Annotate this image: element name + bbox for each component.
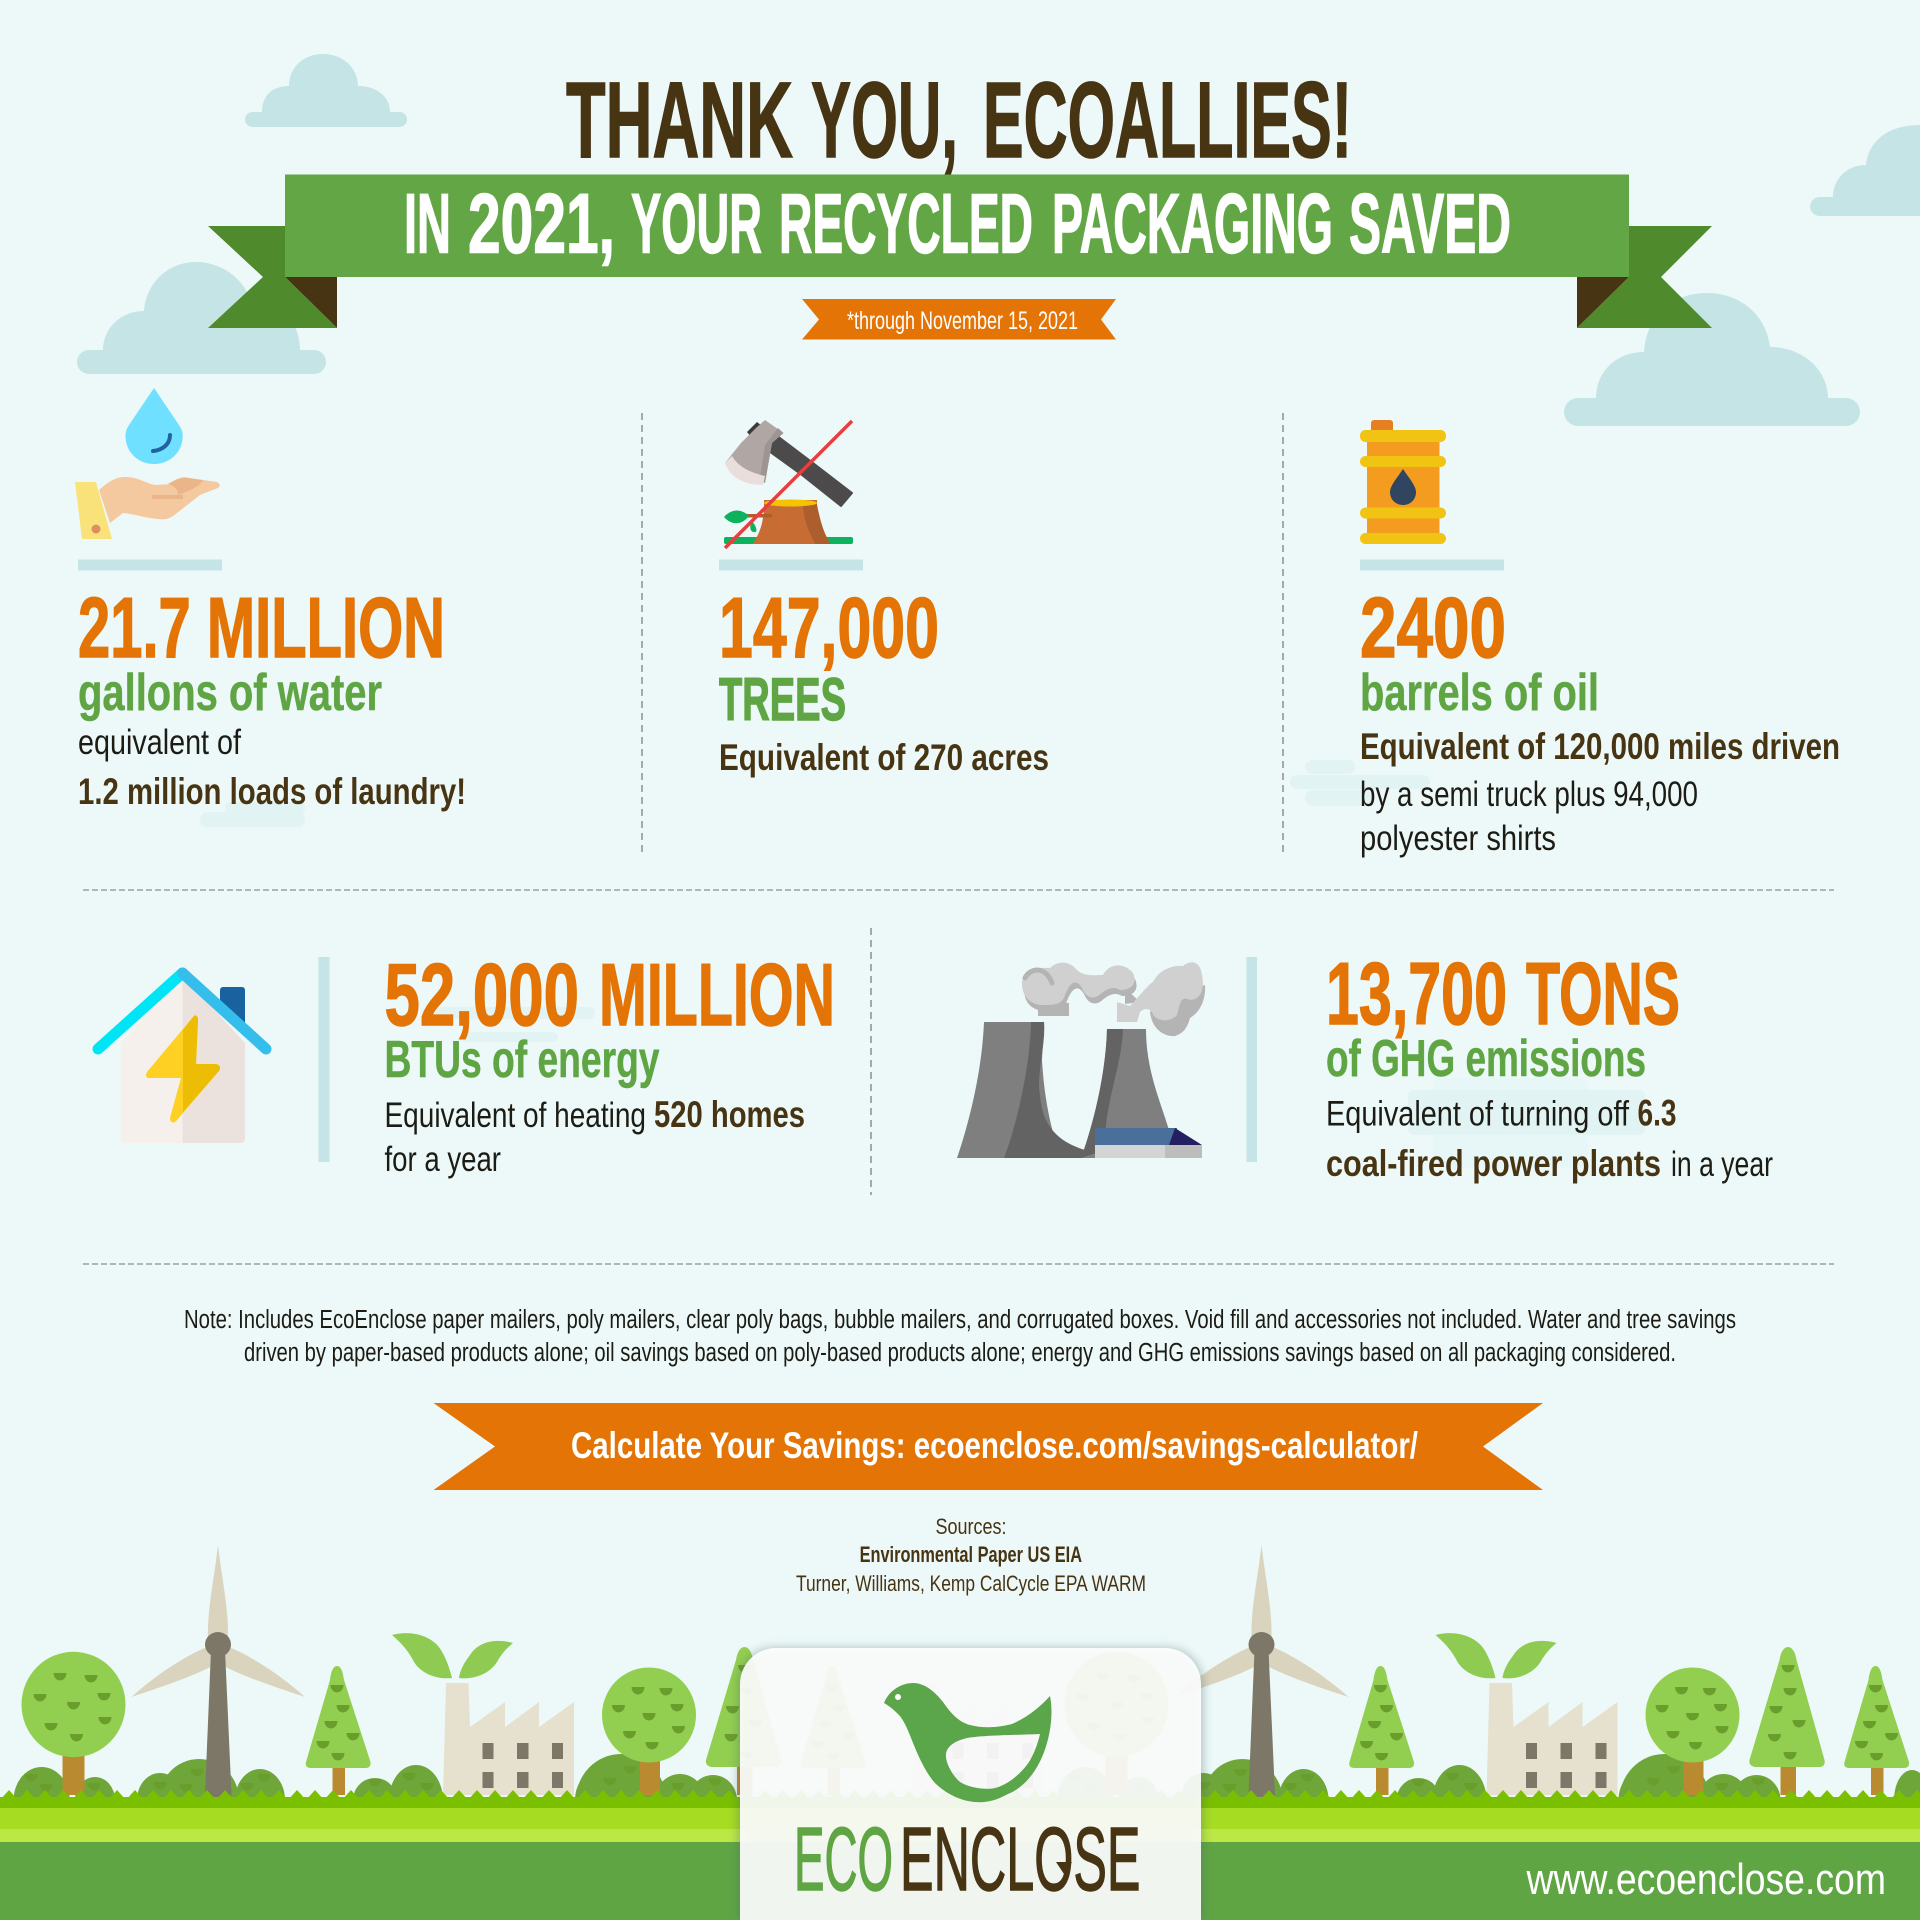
accent bar <box>1360 560 1504 570</box>
logo wordmark: ECO <box>794 1810 893 1910</box>
tree: tall conifer <box>706 1647 781 1795</box>
icon: cooling towers with smoke <box>957 962 1205 1158</box>
logo panel <box>738 1648 1203 1920</box>
horizontal dashed dividers <box>83 890 1834 1264</box>
stat description: 1.2 million loads of laundry! <box>78 771 466 812</box>
stat description: by a semi truck plus 94,000 <box>1360 775 1698 814</box>
stat unit: gallons of water <box>78 664 382 722</box>
icon: water drop and hand <box>75 388 220 539</box>
sources: Sources: <box>936 1514 1006 1539</box>
stat description: in a year <box>1671 1145 1773 1184</box>
title <box>566 59 1352 180</box>
ribbon right tail <box>1577 226 1712 328</box>
stat value: 147,000 <box>719 581 939 676</box>
bird eye <box>895 1694 901 1700</box>
stat description: for a year <box>384 1140 501 1179</box>
stat value <box>384 945 835 1044</box>
icon: house with lightning bolt <box>98 973 266 1143</box>
stat description <box>1326 1092 1773 1184</box>
accent bar <box>719 560 863 570</box>
panel shadow <box>738 1648 1203 1920</box>
panel: GHG savings <box>957 944 1773 1184</box>
stat description: coal-fired power plants <box>1326 1143 1661 1184</box>
stat description <box>1360 726 1840 858</box>
cloud: top left <box>245 54 407 127</box>
stat unit: barrels of oil <box>1360 664 1599 722</box>
accent bar <box>318 957 330 1162</box>
title: YOU, <box>811 59 958 180</box>
sprout leaves left <box>392 1633 513 1678</box>
title: THANK <box>566 59 793 180</box>
stat description: Equivalent of 270 acres <box>719 737 1049 778</box>
panel: tree savings <box>719 420 1049 778</box>
recycling arrow in wordmark <box>1056 1862 1072 1874</box>
ribbon heading: PACKAGING <box>1052 176 1333 270</box>
stat value: MILLION <box>599 945 835 1044</box>
panel: energy savings <box>98 945 835 1179</box>
sources: Environmental Paper US EIA <box>860 1542 1082 1567</box>
sources <box>796 1514 1146 1596</box>
stat value: 13,700 <box>1326 944 1507 1043</box>
call to action ribbon: Calculate Your Savings: ecoenclose.com/savings-calculator/ <box>571 1425 1418 1466</box>
logo wordmark <box>794 1810 1140 1910</box>
icon: oil barrel <box>1360 420 1446 544</box>
sources: Turner, Williams, Kemp CalCycle EPA WARM <box>796 1571 1146 1596</box>
stat description: equivalent of <box>78 723 241 762</box>
stat description: polyester shirts <box>1360 819 1556 858</box>
stat value: 52,000 <box>384 945 579 1044</box>
panel: oil savings <box>1360 420 1840 858</box>
vertical dashed dividers, top row <box>642 413 1283 852</box>
bush far right <box>1894 1770 1920 1830</box>
stat unit: BTUs of energy <box>384 1031 660 1089</box>
bushes left <box>14 1754 737 1846</box>
ribbon heading: RECYCLED <box>779 176 1033 270</box>
cloud: top right <box>1810 125 1920 216</box>
ribbon heading: SAVED <box>1349 176 1511 270</box>
stat unit: of GHG emissions <box>1326 1030 1646 1088</box>
date badge: *through November 15, 2021 <box>847 307 1078 335</box>
stat value: 2400 <box>1360 581 1506 676</box>
tree: round behind logo <box>1064 1652 1168 1795</box>
panel body <box>740 1648 1201 1920</box>
factory left <box>443 1683 574 1795</box>
ground bands <box>0 1790 1920 1920</box>
wind turbine left <box>132 1545 305 1802</box>
title: ECOALLIES! <box>983 59 1352 180</box>
cloud: left behind ribbon <box>77 262 326 374</box>
stat description <box>384 1094 805 1179</box>
tree: tall conifer right <box>1749 1647 1825 1795</box>
ribbon heading: 2021, <box>468 176 615 270</box>
ribbon heading <box>404 176 1511 270</box>
cloud: right below ribbon <box>1564 293 1860 426</box>
stat unit: TREES <box>719 666 846 733</box>
tree: conifer behind logo <box>801 1666 866 1795</box>
accent bar <box>78 560 222 570</box>
call to action ribbon <box>434 1403 1543 1490</box>
tree: conifer <box>306 1666 371 1795</box>
tree: round <box>602 1668 696 1795</box>
stat description: 6.3 <box>1638 1092 1676 1134</box>
stat value: 21.7 MILLION <box>78 581 445 676</box>
stat description: Equivalent of heating <box>384 1096 646 1135</box>
wind turbine right <box>1175 1545 1348 1802</box>
stat description: Equivalent of turning off <box>1326 1094 1629 1134</box>
background clouds <box>77 54 1920 426</box>
stat value: TONS <box>1526 944 1680 1043</box>
factory behind logo <box>913 1683 1044 1795</box>
sprout leaves right <box>1436 1633 1556 1678</box>
tree: conifer far right <box>1844 1666 1909 1795</box>
tree: conifer right <box>1349 1666 1414 1795</box>
accent bar <box>1246 957 1257 1162</box>
stat description <box>78 723 466 812</box>
ribbon heading: IN <box>404 176 451 270</box>
stat description: 520 homes <box>654 1094 805 1135</box>
faint background wisps <box>200 760 1645 1168</box>
ribbon left tail <box>208 226 337 328</box>
icon: axe and stump crossed out <box>724 420 853 548</box>
ribbon body <box>285 174 1629 277</box>
logo wordmark: ENCLOSE <box>900 1810 1140 1910</box>
tree: round left <box>22 1652 126 1795</box>
logo bird <box>884 1683 1051 1802</box>
panel: water savings <box>75 388 466 812</box>
factory right <box>1486 1683 1618 1795</box>
bushes right <box>1057 1754 1780 1846</box>
tree: round right <box>1646 1668 1740 1795</box>
ribbon banner <box>208 174 1712 328</box>
date badge <box>802 299 1116 340</box>
ribbon heading: YOUR <box>631 176 762 270</box>
note text <box>184 1306 1736 1367</box>
